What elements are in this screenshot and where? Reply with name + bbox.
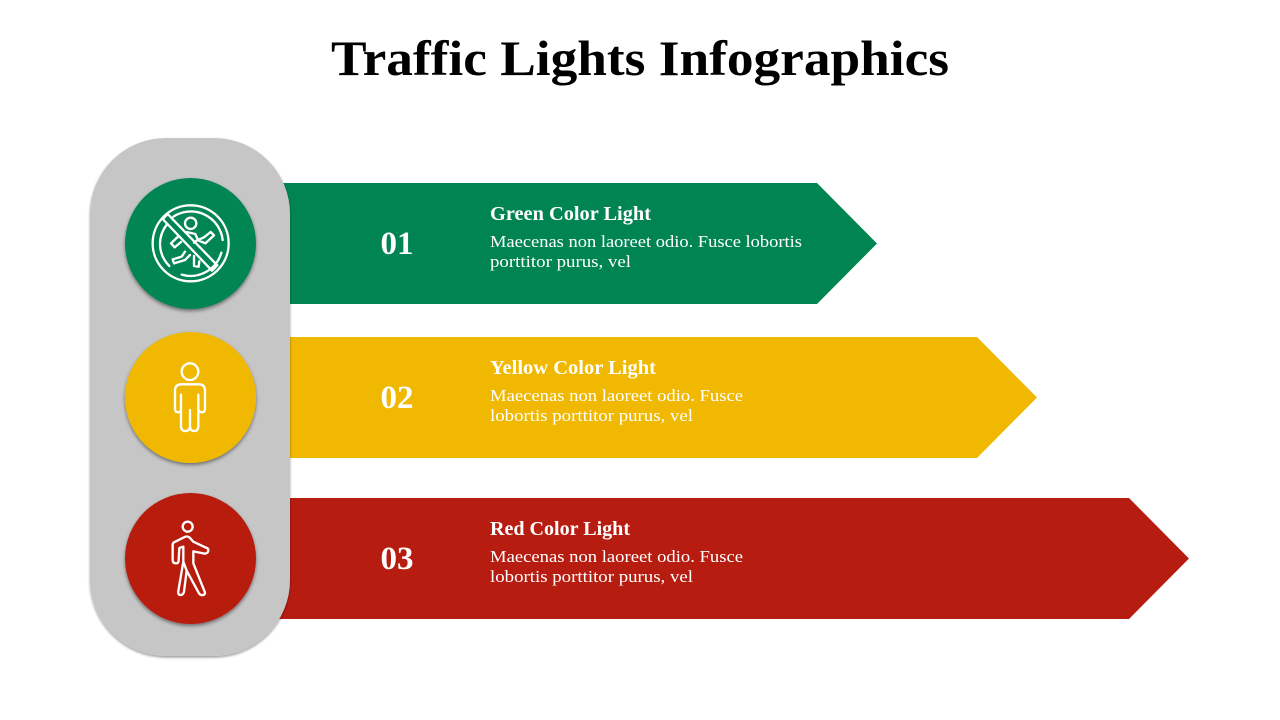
icon: standing person bbox=[175, 363, 205, 431]
row 3: text: Red Color Light bbox=[490, 518, 630, 540]
row 2: text: lobortis porttitor purus, vel bbox=[490, 406, 693, 425]
row 3: number: 03 bbox=[380, 541, 414, 577]
row 3: text: lobortis porttitor purus, vel bbox=[490, 567, 693, 586]
row 2: text: Yellow Color Light bbox=[490, 357, 656, 379]
row 2: text: Maecenas non laoreet odio. Fusce bbox=[490, 386, 743, 405]
yellow light bbox=[125, 332, 256, 463]
panel: traffic light housing bbox=[90, 138, 290, 656]
row 3: text bbox=[490, 518, 743, 586]
arrow: red bbox=[270, 498, 1189, 619]
red light bbox=[125, 493, 256, 624]
icon: no running bbox=[153, 205, 229, 281]
row 1: text: porttitor purus, vel bbox=[490, 252, 631, 271]
row 3: text: Maecenas non laoreet odio. Fusce bbox=[490, 547, 743, 566]
arrow: green bbox=[270, 183, 877, 304]
row 2: number: 02 bbox=[380, 380, 414, 416]
icon: walking person bbox=[173, 522, 208, 595]
row 1: text: Green Color Light bbox=[490, 203, 651, 225]
title: Traffic Lights Infographics bbox=[331, 30, 949, 86]
row 1: text bbox=[490, 203, 802, 271]
row 1: number: 01 bbox=[380, 226, 414, 262]
row 1: text: Maecenas non laoreet odio. Fusce lobortis bbox=[490, 232, 802, 251]
green light bbox=[125, 178, 256, 309]
arrow: yellow bbox=[270, 337, 1037, 458]
row 2: text bbox=[490, 357, 743, 425]
